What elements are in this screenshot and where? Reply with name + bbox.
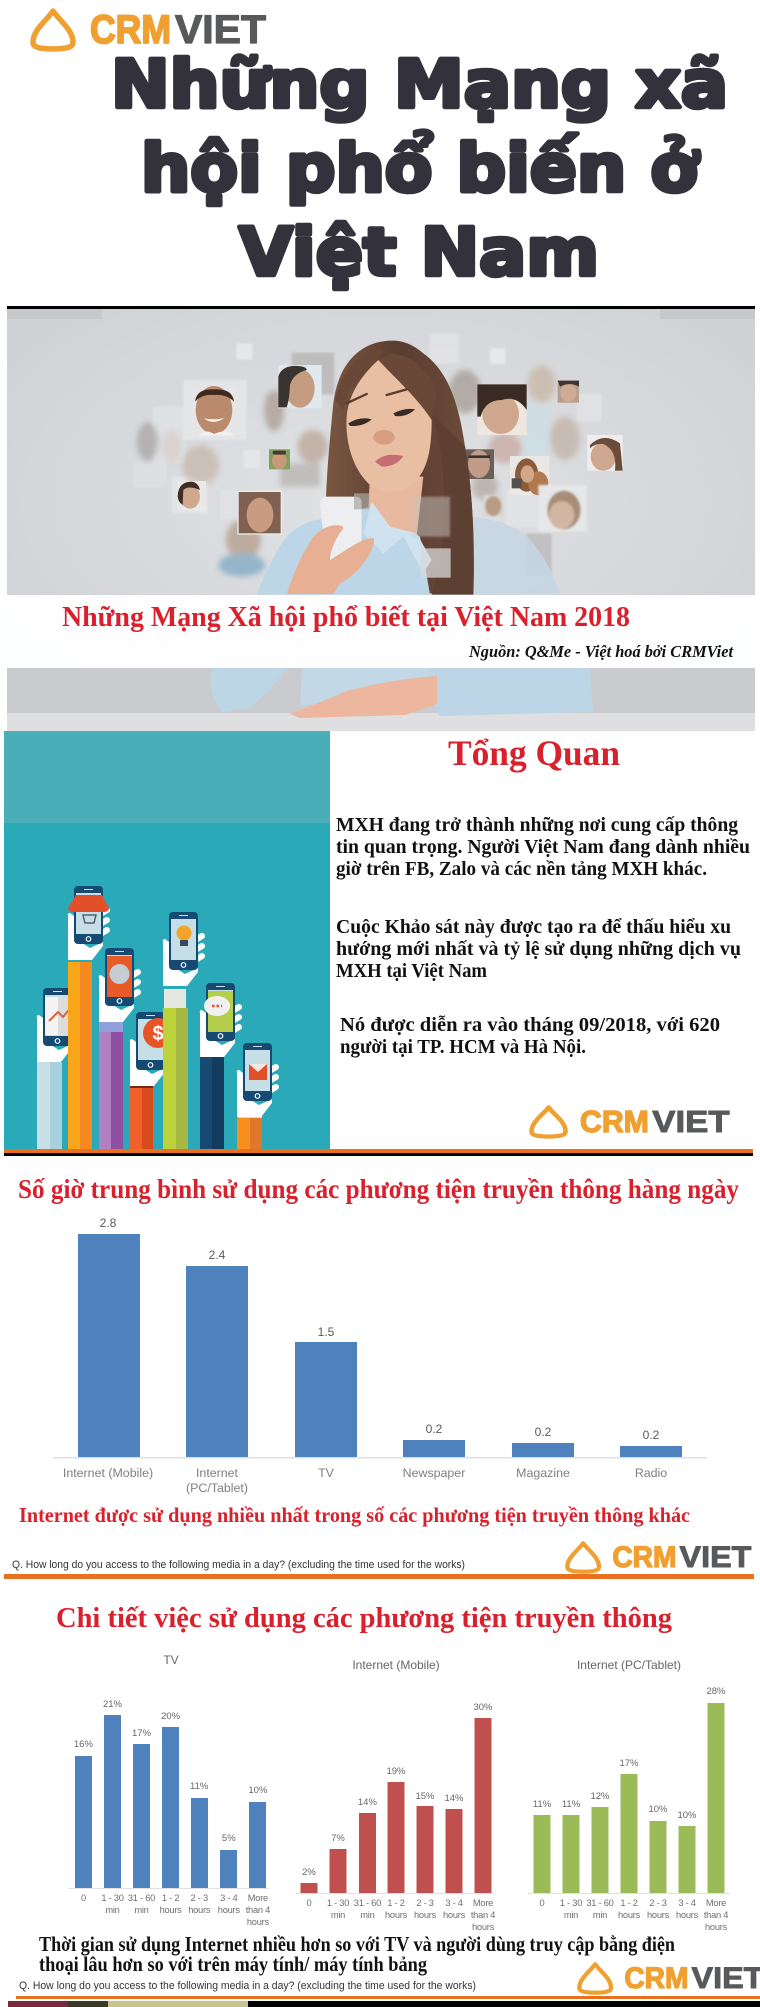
title bbox=[111, 46, 728, 291]
bar chart: average daily hours by media: Newspaper bbox=[403, 1466, 465, 1480]
bar chart: average daily hours by media: Internet bbox=[196, 1466, 239, 1480]
bar chart: Internet (Mobile): 1 - 30 bbox=[327, 1898, 349, 1908]
arm: red with dollar phone: $ bbox=[152, 1023, 164, 1045]
bar chart: Internet (PC/Tablet): 31 - 60 bbox=[586, 1898, 614, 1908]
photo heading: Những Mạng Xã hội phổ biết tại Việt Nam 2018 bbox=[62, 601, 630, 633]
bar chart: Internet (PC/Tablet): More bbox=[706, 1898, 726, 1908]
title: Những Mạng xã bbox=[111, 46, 728, 123]
bar chart: Internet (PC/Tablet): hours bbox=[676, 1910, 699, 1920]
bar chart: Internet (Mobile): hours bbox=[414, 1910, 437, 1920]
arm: navy with chat phone bbox=[200, 983, 239, 1150]
text block: overview paragraph 2: Cuộc Khảo sát này được tạo ra để thấu hiểu xu bbox=[336, 916, 731, 938]
bar chart: Internet (Mobile): hours bbox=[443, 1910, 466, 1920]
bar chart: Internet (Mobile): 15% bbox=[415, 1791, 435, 1802]
bar chart: Internet (PC/Tablet): 11% bbox=[533, 1799, 552, 1810]
logo: average hours: VIET bbox=[680, 1540, 752, 1574]
arm: purple with globe phone bbox=[99, 948, 138, 1150]
survey question: Q. How long do you access to the following media in a day? (excluding the time used for the works) bbox=[12, 1559, 465, 1571]
bar chart: TV: 5% bbox=[222, 1833, 236, 1844]
text block: overview paragraph 1: tin quan trọng. Người Việt Nam đang dành nhiều bbox=[336, 836, 750, 858]
bar chart: Internet (Mobile) bbox=[296, 1658, 495, 1932]
bar chart: Internet (Mobile): 1 - 2 bbox=[387, 1898, 405, 1908]
divider: orange and black bbox=[4, 1149, 753, 1156]
text block: overview paragraph 2 bbox=[336, 916, 741, 982]
bar chart: Internet (PC/Tablet): 17% bbox=[619, 1758, 639, 1769]
bar chart: TV: min bbox=[105, 1905, 120, 1915]
logo: overview: VIET bbox=[652, 1104, 730, 1139]
finding: internet vs TV: Thời gian sử dụng Internet nhiều hơn so với TV và người dùng truy cập bằng điện bbox=[39, 1932, 675, 1956]
bar chart: Internet (PC/Tablet): than 4 bbox=[704, 1910, 728, 1920]
bar chart: Internet (Mobile): 2 - 3 bbox=[416, 1898, 434, 1908]
bar chart: Internet (Mobile): More bbox=[473, 1898, 493, 1908]
logo: CRMViet header bbox=[33, 8, 266, 52]
logo: CRMViet header: CRM bbox=[90, 8, 171, 52]
bar chart: TV: 16% bbox=[74, 1739, 93, 1750]
bar chart: Internet (PC/Tablet): hours bbox=[705, 1922, 728, 1932]
face tile: small top right bbox=[558, 381, 579, 403]
arm: red with dollar phone bbox=[130, 1012, 173, 1150]
text block: overview paragraph 1 bbox=[336, 814, 750, 880]
bar chart: Internet (Mobile): 2% bbox=[302, 1867, 316, 1878]
text block: overview paragraph 1: giờ trên FB, Zalo và các nền tảng MXH khác. bbox=[336, 858, 707, 880]
neck bbox=[368, 477, 423, 537]
bar chart: average daily hours by media: 2.4 bbox=[209, 1248, 226, 1262]
translucent tiles over woman bbox=[421, 548, 451, 578]
bar chart: Internet (PC/Tablet) bbox=[528, 1658, 730, 1932]
bottom image strip bbox=[8, 2001, 760, 2007]
bar chart: Internet (PC/Tablet): hours bbox=[618, 1910, 641, 1920]
bar chart: Internet (Mobile): 19% bbox=[386, 1766, 406, 1777]
bar chart: average daily hours by media: 0.2 bbox=[426, 1422, 443, 1436]
bar chart: Internet (PC/Tablet): 1 - 30 bbox=[560, 1898, 582, 1908]
face tile: young woman bbox=[237, 491, 282, 535]
bar chart: Internet (Mobile): 31 - 60 bbox=[354, 1898, 381, 1908]
face tile: woman lower left bbox=[177, 481, 206, 511]
bar chart: average daily hours by media: Internet (Mobile) bbox=[63, 1466, 153, 1480]
bar chart: Internet (PC/Tablet): 10% bbox=[648, 1804, 668, 1815]
source credit: Nguồn: Q&Me - Việt hoá bởi CRMViet bbox=[468, 642, 734, 661]
title: Việt Nam bbox=[239, 214, 599, 291]
bar chart: average daily hours by media: 0.2 bbox=[535, 1425, 552, 1439]
bar chart: average daily hours by media: 0.2 bbox=[643, 1428, 660, 1442]
text block: overview paragraph 3 bbox=[340, 1014, 720, 1058]
logo: overview: CRM bbox=[580, 1104, 649, 1139]
bar chart: TV: 21% bbox=[103, 1699, 123, 1710]
shirt bbox=[257, 507, 430, 595]
finding: internet vs TV bbox=[39, 1932, 675, 1976]
bar chart: Internet (Mobile): min bbox=[360, 1910, 375, 1920]
bar chart: Internet (Mobile): 14% bbox=[444, 1793, 464, 1804]
bar chart: Internet (PC/Tablet): 12% bbox=[590, 1791, 610, 1802]
bar chart: TV: More bbox=[248, 1893, 268, 1903]
logo: overview bbox=[532, 1104, 730, 1139]
arm: orange with shopping phone bbox=[68, 886, 109, 1150]
bar chart: TV: 1 - 30 bbox=[101, 1893, 124, 1903]
face tile: small man green bbox=[269, 449, 290, 469]
bar chart: Internet (Mobile): hours bbox=[472, 1922, 495, 1932]
bar chart: Internet (PC/Tablet): min bbox=[564, 1910, 578, 1920]
face tile: man with glasses bbox=[278, 365, 322, 408]
text block: overview paragraph 3: người tại TP. HCM và Hà Nội. bbox=[340, 1036, 586, 1058]
bar chart: Internet (PC/Tablet): 11% bbox=[562, 1799, 581, 1810]
bar chart: Internet (Mobile): Internet (Mobile) bbox=[352, 1658, 440, 1672]
bar chart: TV: 10% bbox=[248, 1785, 268, 1796]
bar chart: TV bbox=[68, 1653, 270, 1927]
arm: orange with mail phone bbox=[237, 1043, 276, 1150]
divider: orange bbox=[16, 1996, 760, 1999]
bar chart: average daily hours by media: TV bbox=[318, 1466, 335, 1480]
bar chart: Internet (PC/Tablet): 2 - 3 bbox=[649, 1898, 667, 1908]
bar chart: average daily hours by media: 2.8 bbox=[100, 1216, 117, 1230]
illustration: woman with floating faces bbox=[133, 333, 623, 595]
panel: hero photo bbox=[7, 309, 755, 731]
bar chart: Internet (Mobile): 30% bbox=[473, 1702, 493, 1713]
bar chart: Internet (Mobile): min bbox=[331, 1910, 345, 1920]
title: hội phổ biến ở bbox=[141, 130, 700, 207]
logo: details bbox=[579, 1961, 760, 1995]
bar chart: TV: 20% bbox=[161, 1711, 181, 1722]
bar chart: Internet (Mobile): 3 - 4 bbox=[445, 1898, 463, 1908]
bar chart: Internet (Mobile): 0 bbox=[307, 1898, 312, 1908]
logo: CRMViet header: VIET bbox=[175, 8, 266, 52]
bar chart: TV: 3 - 4 bbox=[220, 1893, 238, 1903]
face tile: woman far right bbox=[587, 435, 623, 471]
text block: overview paragraph 1: MXH đang trở thành những nơi cung cấp thông bbox=[336, 814, 739, 836]
face tile: woman right bbox=[477, 384, 527, 435]
bar chart: Internet (Mobile): 7% bbox=[331, 1833, 345, 1844]
arm: light blue with chart phone bbox=[37, 988, 78, 1150]
hand bbox=[287, 525, 374, 594]
collar bbox=[363, 502, 432, 573]
bar chart: TV: 2 - 3 bbox=[191, 1893, 208, 1903]
bar chart: TV: hours bbox=[160, 1905, 182, 1915]
bar chart: Internet (Mobile): hours bbox=[385, 1910, 408, 1920]
panel: overview teal illustration bbox=[4, 731, 330, 1150]
eyes, nose, lips bbox=[348, 418, 372, 426]
bar chart: Internet (PC/Tablet): hours bbox=[647, 1910, 670, 1920]
bar chart: Internet (PC/Tablet): 3 - 4 bbox=[678, 1898, 696, 1908]
bar chart: Internet (PC/Tablet): 0 bbox=[540, 1898, 545, 1908]
face tile: two women bbox=[510, 456, 549, 495]
bar chart: TV: 11% bbox=[190, 1781, 209, 1792]
bar chart: Internet (PC/Tablet): Internet (PC/Tablet) bbox=[577, 1658, 681, 1672]
bar chart: TV: hours bbox=[247, 1917, 269, 1927]
logo: average hours bbox=[567, 1540, 752, 1574]
survey question: Q. How long do you access to the following media in a day? (excluding the time used for the works) bbox=[19, 1980, 476, 1992]
illustration: arms and hand on table bbox=[210, 668, 593, 718]
bar chart: TV: 17% bbox=[132, 1728, 152, 1739]
bar chart: TV: min bbox=[134, 1905, 149, 1915]
bar chart: TV: 0 bbox=[81, 1893, 86, 1903]
bar chart: average daily hours by media: Radio bbox=[635, 1466, 667, 1480]
bar chart: average daily hours by media bbox=[53, 1216, 707, 1495]
phone in hand bbox=[320, 497, 362, 561]
logo: details: CRM bbox=[624, 1961, 688, 1995]
arm: green with lightbulb phone bbox=[163, 912, 202, 1150]
divider: orange bbox=[4, 1574, 754, 1579]
hair back bbox=[326, 341, 474, 593]
bar chart: TV: TV bbox=[163, 1653, 179, 1667]
bar chart: Internet (PC/Tablet): min bbox=[593, 1910, 607, 1920]
face tile: man smiling bbox=[195, 386, 236, 436]
bar chart: TV: hours bbox=[188, 1905, 211, 1915]
finding: internet most used: Internet được sử dụng nhiều nhất trong số các phương tiện truyền thông khác bbox=[19, 1503, 690, 1527]
logo: details: VIET bbox=[692, 1961, 760, 1995]
bar chart: Internet (Mobile): 14% bbox=[358, 1797, 377, 1808]
logo: average hours: CRM bbox=[612, 1540, 676, 1574]
text block: overview paragraph 2: hướng mới nhất và tỷ lệ sử dụng những dịch vụ bbox=[336, 938, 741, 960]
face tile: glasses man bbox=[464, 449, 494, 479]
bar chart: average daily hours by media: (PC/Tablet) bbox=[186, 1481, 248, 1495]
heading: details: Chi tiết việc sử dụng các phương tiện truyền thông bbox=[56, 1603, 672, 1634]
finding: internet vs TV: thoại lâu hơn so với trên máy tính/ máy tính bảng bbox=[39, 1952, 427, 1976]
face tile: small blurred faces bbox=[483, 485, 587, 532]
face bbox=[346, 360, 432, 491]
heading: overview: Tổng Quan bbox=[448, 733, 620, 773]
white caption band bbox=[7, 595, 755, 668]
bar chart: Internet (PC/Tablet): 28% bbox=[706, 1686, 726, 1697]
bar chart: average daily hours by media: 1.5 bbox=[318, 1325, 335, 1339]
hair strand in front bbox=[432, 413, 474, 595]
divider bar bbox=[7, 306, 755, 310]
text block: overview paragraph 3: Nó được diễn ra vào tháng 09/2018, với 620 bbox=[340, 1014, 720, 1036]
bar chart: Internet (PC/Tablet): 10% bbox=[677, 1810, 697, 1821]
bar chart: TV: 31 - 60 bbox=[128, 1893, 155, 1903]
text block: overview paragraph 2: MXH tại Việt Nam bbox=[336, 960, 487, 982]
bar chart: Internet (PC/Tablet): 1 - 2 bbox=[620, 1898, 638, 1908]
bar chart: Internet (Mobile): than 4 bbox=[471, 1910, 495, 1920]
bar chart: TV: hours bbox=[218, 1905, 240, 1915]
bar chart: TV: than 4 bbox=[246, 1905, 270, 1915]
bar chart: average daily hours by media: Magazine bbox=[516, 1466, 570, 1480]
bar chart: TV: 1 - 2 bbox=[162, 1893, 179, 1903]
